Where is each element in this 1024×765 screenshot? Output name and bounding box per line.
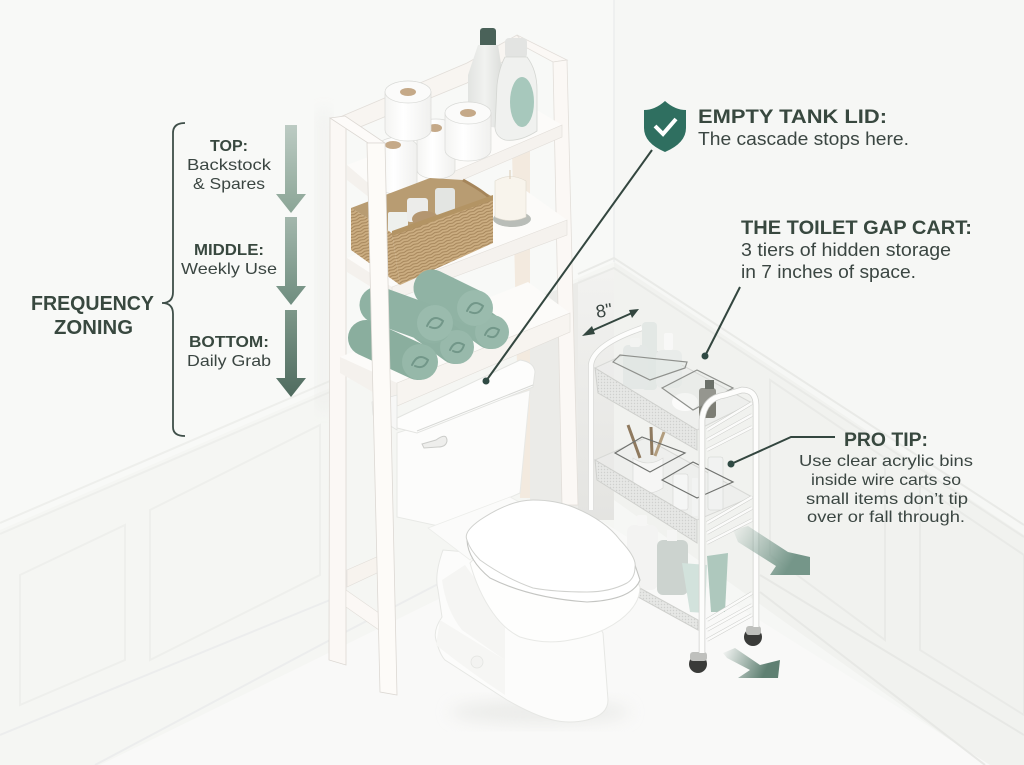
callout: empty tank lid: EMPTY TANK LID: (698, 107, 887, 128)
toilet pedestal (435, 550, 608, 722)
callout line: cart (702, 287, 740, 360)
dimension arrow: 8 inches (582, 299, 639, 336)
arrow: bottom zone (276, 310, 306, 397)
dimension arrow: 8 inches: 8" (594, 299, 614, 322)
shelf: top (347, 100, 562, 212)
floor and wall shadows (318, 110, 630, 724)
cart front frame (702, 390, 756, 653)
callout line: tank lid (482, 150, 652, 384)
callout: toilet gap cart: in 7 inches of space. (741, 262, 916, 282)
curly brace (162, 123, 185, 436)
zone label: middle: Weekly Use (181, 261, 277, 278)
shelf: bottom (340, 282, 570, 406)
bowl (470, 530, 640, 642)
zone label: middle (181, 242, 277, 278)
bottles on top shelf (468, 28, 537, 140)
seat rim (467, 520, 640, 602)
callout: pro tip: inside wire carts so (811, 472, 961, 489)
rolled green towels (366, 288, 509, 380)
frequency zoning label: FREQUENCY (31, 293, 155, 315)
lid corner behind leg (372, 395, 397, 430)
shelving unit front leg and top bar (330, 116, 397, 695)
zone label: bottom (187, 334, 271, 370)
toilet paper rolls (378, 81, 491, 194)
floor arrow: upper (733, 526, 810, 575)
candle on tray (493, 170, 531, 227)
cart tier: bottom (627, 515, 752, 640)
woven basket with items (351, 178, 493, 285)
shelving unit back frame (329, 35, 578, 665)
icon: green shield with check (644, 101, 686, 152)
callout: pro tip: PRO TIP: (844, 430, 928, 451)
callout: toilet gap cart: THE TOILET GAP CART: (741, 218, 972, 239)
callout: toilet gap cart: 3 tiers of hidden storage (741, 240, 951, 260)
callout: pro tip: small items don’t tip (806, 491, 968, 508)
frequency zoning label (31, 293, 155, 339)
zone label: bottom: Daily Grab (187, 353, 271, 370)
cart tier: top (595, 322, 752, 450)
callout line: pro tip (728, 437, 835, 468)
cart tier: middle (595, 425, 752, 543)
zone label: top: Backstock (187, 157, 272, 174)
shelf: middle (347, 190, 567, 300)
floor arrow: lower (723, 648, 780, 678)
callout: empty tank lid: The cascade stops here. (698, 129, 909, 149)
arrow: middle zone (276, 217, 306, 305)
zone label: top: TOP: (210, 138, 248, 155)
items: bottom tier (627, 515, 728, 613)
neck (428, 497, 525, 560)
flush handle (422, 436, 447, 448)
toilet (372, 360, 640, 722)
zone label: top: & Spares (193, 176, 265, 193)
zone label: middle: MIDDLE: (194, 242, 264, 259)
zone label: bottom: BOTTOM: (189, 334, 269, 351)
tank lid (397, 360, 535, 433)
zone label: top (187, 138, 272, 193)
cart wheels (689, 626, 762, 673)
toilet tank (397, 390, 530, 527)
callout: empty tank lid (698, 107, 909, 149)
items: middle tier (615, 425, 733, 516)
items: top tier (613, 322, 733, 418)
seat lid (466, 500, 635, 592)
callout: toilet gap cart (741, 218, 972, 282)
frequency zoning label: ZONING (54, 317, 133, 339)
arrow: top zone (276, 125, 306, 213)
callout: pro tip: Use clear acrylic bins (799, 453, 973, 470)
callout: pro tip: over or fall through. (807, 509, 965, 526)
callout: pro tip (799, 430, 973, 526)
wire cart back post (591, 328, 642, 510)
